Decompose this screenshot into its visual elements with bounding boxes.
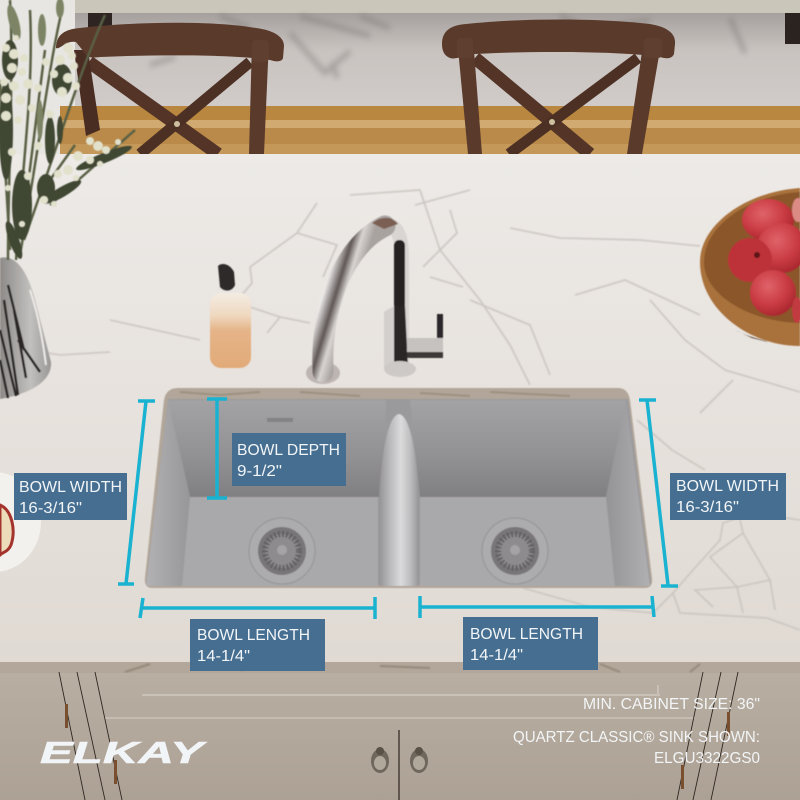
countertop — [0, 154, 800, 664]
counter edge veins — [125, 664, 700, 672]
chair: right — [442, 20, 675, 154]
label: bowl width right: 16-3/16" — [676, 499, 739, 516]
label plate — [267, 418, 293, 422]
icon: plant and vase — [0, 0, 135, 399]
sink model text — [513, 729, 760, 767]
chair: left — [56, 23, 284, 154]
door stiles — [59, 672, 738, 800]
label: bowl width left: 16-3/16" — [19, 500, 82, 517]
bowl divider — [379, 414, 419, 586]
label: bowl depth: BOWL DEPTH — [237, 442, 340, 459]
dimension: bowl width right — [639, 400, 678, 586]
sink rim — [145, 388, 652, 588]
faucet stem — [384, 225, 402, 360]
dimension: bowl depth — [207, 399, 227, 498]
label: bowl depth — [232, 433, 346, 486]
door gap — [398, 730, 400, 800]
right knob — [410, 747, 428, 773]
cabinet — [0, 662, 800, 800]
label: bowl width left — [14, 473, 127, 520]
dimension: bowl length right — [420, 596, 654, 618]
icon: soap dispenser — [210, 264, 251, 368]
right drain — [482, 518, 548, 584]
icon: faucet — [306, 218, 443, 384]
hinges — [65, 704, 730, 789]
vase — [0, 257, 51, 399]
dimension: bowl length left — [140, 597, 375, 619]
chair back — [442, 20, 675, 58]
sink — [145, 388, 652, 588]
logo: Elkay: ELKAY — [40, 735, 208, 770]
left knob — [371, 747, 389, 773]
sink model text: ELGU3322GS0 — [654, 750, 760, 767]
left bowl — [146, 400, 386, 586]
label: bowl length left: 14-1/4" — [197, 648, 250, 665]
drawer front — [105, 685, 695, 718]
marble veining — [0, 190, 800, 630]
right bowl — [410, 400, 650, 586]
label: bowl length left — [190, 619, 325, 671]
spout — [323, 226, 385, 372]
label: bowl length right: BOWL LENGTH — [470, 626, 583, 643]
stems and leaves — [0, 0, 135, 260]
label: bowl width right — [670, 473, 786, 520]
cabinet size text: MIN. CABINET SIZE: 36" — [583, 696, 760, 713]
label: bowl length left: BOWL LENGTH — [197, 627, 310, 644]
icon: plate with apple slice — [0, 472, 41, 572]
sink model text: QUARTZ CLASSIC® SINK SHOWN: — [513, 729, 760, 746]
icon: bowl of apples — [700, 188, 800, 346]
label: bowl length right — [463, 617, 598, 670]
left drain — [249, 518, 315, 584]
background room — [0, 0, 800, 154]
label: bowl width left: BOWL WIDTH — [19, 479, 122, 496]
dimension: bowl width left — [118, 401, 155, 584]
chair back — [56, 23, 284, 61]
label: bowl length right: 14-1/4" — [470, 647, 523, 664]
label: bowl depth: 9-1/2" — [237, 463, 282, 480]
label: bowl width right: BOWL WIDTH — [676, 478, 779, 495]
